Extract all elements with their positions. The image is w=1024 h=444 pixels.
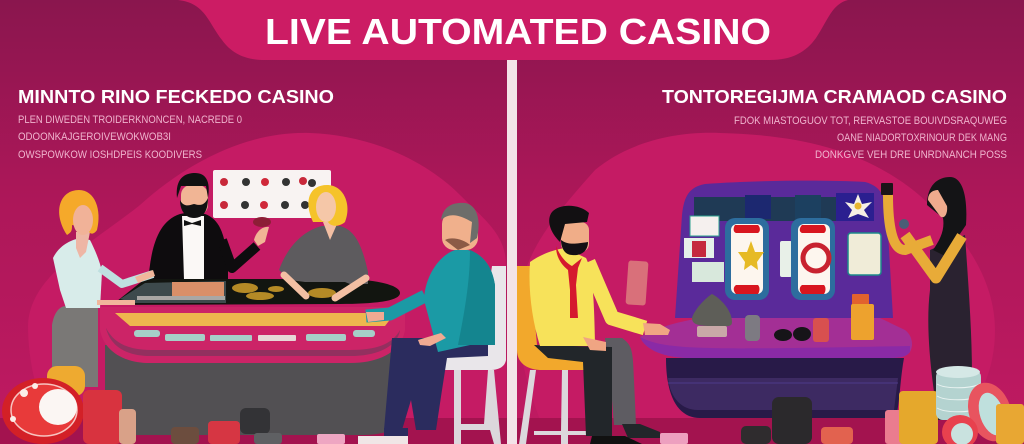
machine cabinet (675, 181, 893, 318)
floor band (0, 418, 1024, 444)
shoes (622, 424, 660, 438)
orange bottle (851, 294, 874, 340)
left heading: MINNTO RINO FECKEDO CASINO (18, 86, 334, 107)
yellow table strip (115, 313, 395, 326)
navy legs (384, 338, 488, 430)
title banner (178, 0, 848, 60)
tall black stack (772, 397, 812, 444)
right reel (791, 218, 835, 300)
yellow stack (899, 391, 938, 444)
chip column (745, 315, 760, 341)
right chip piles (660, 366, 1024, 444)
left blob shape (28, 133, 506, 420)
pink stack (885, 410, 911, 444)
mid tile (780, 241, 792, 277)
large red poker chip (2, 378, 84, 444)
seated man in teal with white chair (358, 203, 506, 444)
red stack (821, 427, 853, 444)
torso (529, 248, 595, 346)
center brown stack (171, 427, 199, 444)
left reel (725, 218, 769, 300)
right description line 3: DONKGVE VEH DRE UNRDNANCH POSS (815, 149, 1007, 161)
betting spots (134, 330, 375, 341)
grey chip stack (254, 433, 282, 444)
table top felt (112, 279, 400, 305)
tie (556, 246, 582, 318)
side game tiles (684, 216, 724, 282)
head (561, 222, 589, 252)
right blob shape (517, 133, 995, 420)
hands (643, 323, 670, 335)
top game strip (694, 193, 874, 221)
pink card stack (317, 434, 345, 444)
floating card stack (625, 260, 649, 306)
pink card stack (660, 433, 688, 444)
center red stack (208, 421, 240, 444)
gold table scatter (232, 283, 336, 300)
black chips two (793, 327, 811, 341)
center black stack (240, 408, 270, 434)
woman in black dress (881, 177, 972, 420)
counter base (666, 358, 904, 418)
peach chip stack (119, 409, 136, 444)
roulette gaming table (100, 279, 405, 435)
purple counter (640, 318, 912, 418)
left text block (18, 86, 334, 161)
right text block (662, 86, 1007, 161)
grey vase (692, 294, 732, 326)
right heading: TONTOREGIJMA CRAMAOD CASINO (662, 86, 1007, 107)
dealer in tuxedo (148, 173, 271, 285)
white chip stack (936, 366, 981, 420)
red and white chips (942, 377, 1019, 444)
card display board (213, 170, 331, 218)
far right yellow stack (996, 404, 1024, 444)
gold chip stack (47, 366, 85, 396)
black chips (774, 329, 792, 341)
dark leg (534, 345, 612, 436)
gray leg (605, 338, 636, 425)
slot machine (675, 181, 893, 318)
blonde woman standing left (52, 190, 155, 387)
red chip stack (83, 390, 122, 444)
chair (517, 266, 586, 370)
counter items (692, 294, 874, 342)
seated man in yellow with orange chair (517, 206, 670, 444)
title: LIVE AUTOMATED CASINO (265, 11, 771, 52)
center divider (507, 60, 517, 444)
left description line 3: OWSPOWKOW IOSHDPEIS KOODIVERS (18, 149, 202, 161)
red chip cup (813, 318, 829, 342)
small black stack (741, 426, 771, 444)
left description line 1: PLEN DIWEDEN TROIDERKNONCEN, NACREDE 0 (18, 114, 242, 126)
side screen (848, 233, 881, 275)
blonde player behind table (279, 185, 368, 298)
left description line 2: ODOONKAJGEROIVEWOKWOB3I (18, 131, 171, 143)
left chip piles (2, 366, 345, 444)
table rim (100, 307, 405, 363)
